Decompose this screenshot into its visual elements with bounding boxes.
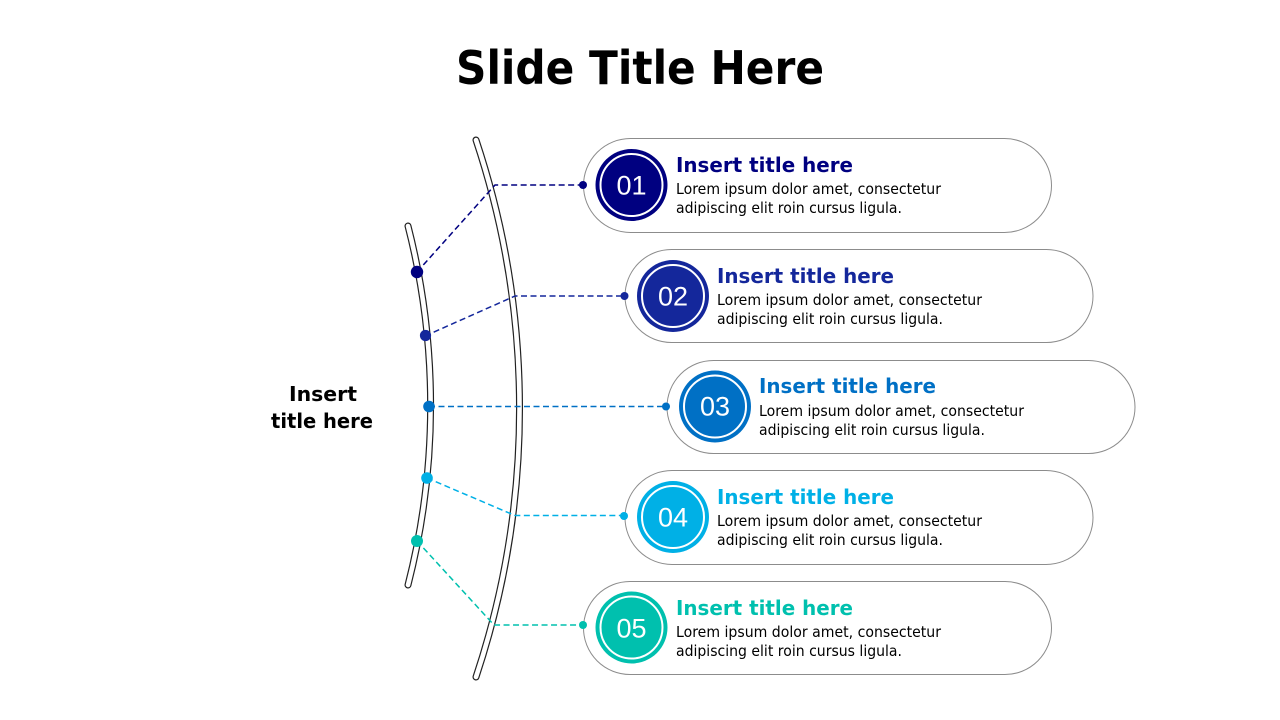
panel: item 03: Insert title here bbox=[759, 374, 936, 398]
connector 01 bbox=[411, 185, 583, 278]
connector 03 bbox=[423, 401, 666, 412]
panel: item 05: 05 bbox=[616, 614, 647, 644]
title: Slide Title Here bbox=[456, 41, 824, 95]
large arc bbox=[476, 140, 520, 677]
panel: item 03: adipiscing elit roin cursus ligula. bbox=[759, 421, 985, 439]
panel: item 02: adipiscing elit roin cursus ligula. bbox=[717, 310, 943, 328]
connector 05 bbox=[411, 535, 583, 625]
connector 02 bbox=[420, 296, 624, 341]
panel: item 02: Lorem ipsum dolor amet, consectetur bbox=[717, 291, 983, 309]
panel: item 03: Lorem ipsum dolor amet, consectetur bbox=[759, 402, 1025, 420]
connector 04 bbox=[421, 472, 624, 516]
panel: item 01: Lorem ipsum dolor amet, consectetur bbox=[676, 180, 942, 198]
left label: title here bbox=[271, 409, 373, 433]
panel: item 01 bbox=[579, 138, 1052, 232]
panel: item 01: 01 bbox=[616, 170, 647, 200]
panel: item 04: adipiscing elit roin cursus ligula. bbox=[717, 531, 943, 549]
panel: item 02: Insert title here bbox=[717, 264, 894, 288]
panel: item 03 bbox=[662, 360, 1135, 454]
panel: item 05: adipiscing elit roin cursus ligula. bbox=[676, 642, 902, 660]
panel: item 05 bbox=[579, 582, 1052, 674]
panel: item 03: 03 bbox=[700, 392, 730, 422]
panel: item 01: Insert title here bbox=[676, 153, 853, 177]
panel: item 05: Insert title here bbox=[676, 596, 853, 620]
panel: item 02: 02 bbox=[658, 282, 688, 312]
panel: item 04 bbox=[620, 470, 1093, 564]
panel: item 05: Lorem ipsum dolor amet, consectetur bbox=[676, 623, 942, 641]
left label: Insert bbox=[289, 382, 357, 406]
left label bbox=[271, 382, 373, 433]
panel: item 04: Lorem ipsum dolor amet, consectetur bbox=[717, 512, 983, 530]
panel: item 01: adipiscing elit roin cursus ligula. bbox=[676, 199, 902, 217]
panel: item 02 bbox=[620, 250, 1093, 342]
panel: item 04: Insert title here bbox=[717, 485, 894, 509]
panel: item 04: 04 bbox=[658, 502, 688, 532]
small arc bbox=[408, 226, 431, 585]
